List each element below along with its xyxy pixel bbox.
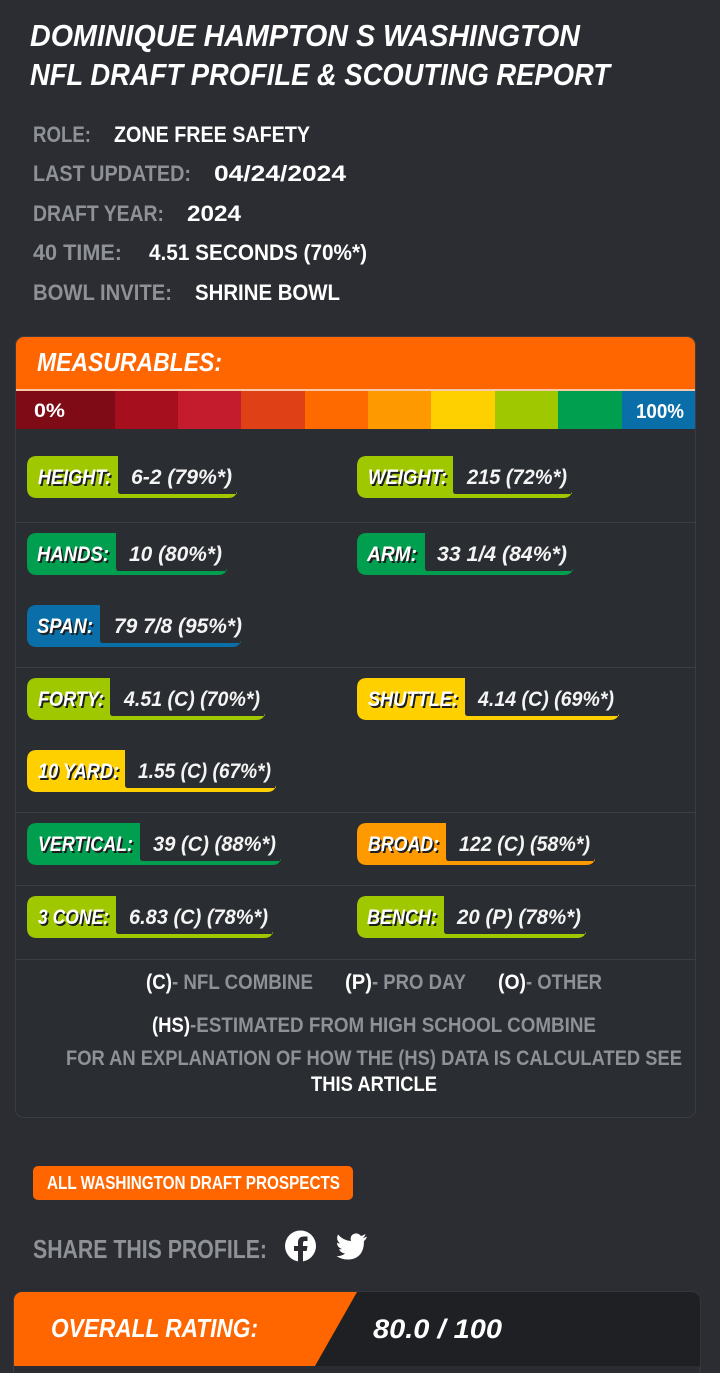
stat: forty xyxy=(27,678,265,720)
stat: 10 yard xyxy=(27,750,276,792)
stat: forty: 4.51 (C) (70%*) xyxy=(123,688,260,711)
player info list: DRAFT YEAR: xyxy=(33,201,164,226)
stat: weight: WEIGHT: xyxy=(368,466,447,489)
stat: 3 cone: 3 CONE: xyxy=(38,906,109,929)
stat: bench xyxy=(357,896,586,938)
stat: height xyxy=(27,456,237,498)
measurables header: MEASURABLES: xyxy=(37,347,222,377)
percentile colour scale xyxy=(16,391,695,429)
title xyxy=(30,18,613,92)
legend notes xyxy=(66,971,682,1096)
stat: hands xyxy=(27,533,227,575)
stat: 3 cone: 6.83 (C) (78%*) xyxy=(129,906,268,929)
player info list: SHRINE BOWL xyxy=(195,280,340,305)
stat: shuttle xyxy=(357,678,619,720)
player info list: 4.51 SECONDS (70%*) xyxy=(149,240,367,265)
stat: hands: 10 (80%*) xyxy=(129,543,222,566)
button: all washington draft prospects xyxy=(33,1166,353,1200)
stat: arm: 33 1/4 (84%*) xyxy=(437,543,567,566)
stat: bench: BENCH: xyxy=(367,906,437,929)
player info list: 40 TIME: xyxy=(33,240,122,265)
stat: weight: 215 (72%*) xyxy=(466,466,567,489)
stat: forty: FORTY: xyxy=(38,688,104,711)
legend notes: -ESTIMATED FROM HIGH SCHOOL COMBINE xyxy=(190,1014,596,1037)
stat: bench: 20 (P) (78%*) xyxy=(456,906,581,929)
player info list: LAST UPDATED: xyxy=(33,161,191,186)
title: DOMINIQUE HAMPTON S WASHINGTON xyxy=(30,18,581,53)
stat: shuttle: SHUTTLE: xyxy=(368,688,458,711)
player info list: ROLE: xyxy=(33,122,91,147)
icon: facebook xyxy=(285,1230,316,1262)
player info list: ZONE FREE SAFETY xyxy=(114,122,310,147)
player info list: 04/24/2024 xyxy=(214,161,347,186)
stat: height: HEIGHT: xyxy=(38,466,111,489)
legend notes: - NFL COMBINE xyxy=(172,971,313,994)
rating label xyxy=(14,1292,357,1366)
panel: measurables xyxy=(16,336,696,1118)
icon: twitter xyxy=(336,1233,367,1260)
stat: span: 79 7/8 (95%*) xyxy=(114,615,242,638)
legend notes: (HS) xyxy=(152,1014,190,1037)
legend notes: THIS ARTICLE xyxy=(311,1073,437,1096)
player info list: BOWL INVITE: xyxy=(33,280,172,305)
legend notes: - OTHER xyxy=(526,971,602,994)
legend notes: (C) xyxy=(146,971,172,994)
panel: overall rating xyxy=(14,1292,700,1373)
stat: vertical: 39 (C) (88%*) xyxy=(153,833,276,856)
percentile colour scale: 0% xyxy=(34,401,65,422)
stat: height: 6-2 (79%*) xyxy=(131,466,232,489)
stat: broad: BROAD: xyxy=(368,833,439,856)
stat: hands: HANDS: xyxy=(37,543,109,566)
percentile colour scale: 100% xyxy=(636,401,684,423)
stat: arm xyxy=(357,533,573,575)
title: NFL DRAFT PROFILE & SCOUTING REPORT xyxy=(30,57,613,92)
stat: 3 cone xyxy=(27,896,273,938)
legend notes: - PRO DAY xyxy=(372,971,466,994)
stat: span xyxy=(27,605,242,647)
stat: 10 yard: 10 YARD: xyxy=(38,760,119,783)
stat: vertical xyxy=(27,823,281,865)
player info list: 2024 xyxy=(187,201,242,226)
rating value: 80.0 / 100 xyxy=(373,1314,502,1344)
button: all washington draft prospects: ALL WASHINGTON DRAFT PROSPECTS xyxy=(47,1173,340,1193)
legend notes: (O) xyxy=(498,971,526,994)
share label: SHARE THIS PROFILE: xyxy=(33,1234,267,1264)
rating label: OVERALL RATING: xyxy=(51,1313,258,1343)
stat: arm: ARM: xyxy=(366,543,417,566)
player info list xyxy=(33,122,367,305)
stat: vertical: VERTICAL: xyxy=(38,833,133,856)
stat: shuttle: 4.14 (C) (69%*) xyxy=(477,688,614,711)
measurables header xyxy=(16,337,695,389)
stat: weight xyxy=(357,456,572,498)
stat: 10 yard: 1.55 (C) (67%*) xyxy=(138,760,271,783)
legend notes: (P) xyxy=(345,971,372,994)
stat: span: SPAN: xyxy=(37,615,93,638)
stat: broad xyxy=(357,823,595,865)
stat: broad: 122 (C) (58%*) xyxy=(459,833,590,856)
